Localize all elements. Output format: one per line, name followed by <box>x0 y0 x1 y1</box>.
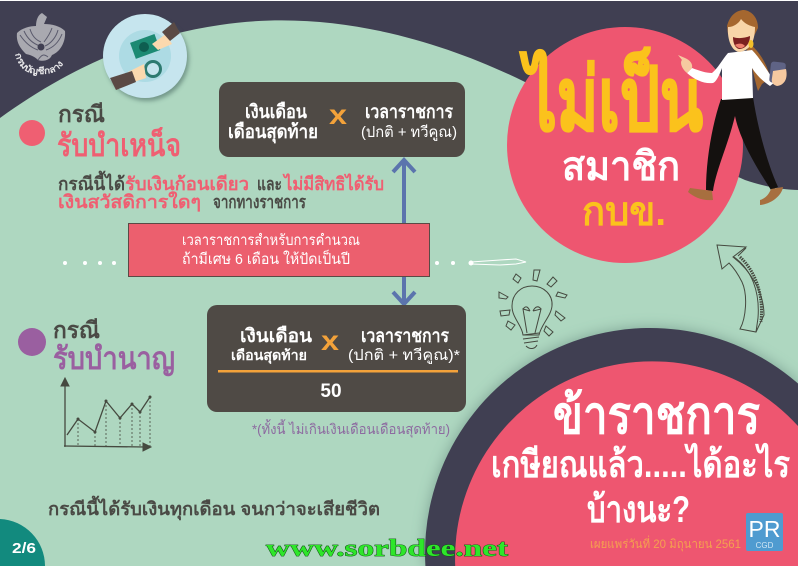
dotted divider with pen <box>63 259 526 266</box>
text block: pension description <box>58 170 384 212</box>
page number tab <box>0 519 45 566</box>
label: service time: เวลาราชการ <box>361 326 450 347</box>
note box: rounding rule: เวลาราชการสำหรับการคำนวณ <box>182 232 360 249</box>
phone <box>769 61 786 84</box>
icon: curved hand-drawn arrow <box>717 245 764 332</box>
right margin strip <box>798 0 800 566</box>
note box: rounding rule <box>128 224 430 276</box>
trousers <box>706 97 778 191</box>
section: annuity heading <box>18 317 175 377</box>
formula box: lump-sum: เดือนสุดท้าย <box>228 121 318 144</box>
shirt <box>687 50 775 100</box>
label: salary: เงินเดือน <box>240 325 312 347</box>
text block: pension description: ไม่มีสิทธิได้รับ <box>282 173 384 194</box>
bullet: pink <box>19 120 45 146</box>
page number tab: 2/6 <box>12 540 36 557</box>
text block: pension description: กรณีนี้ได้ <box>58 170 125 194</box>
title: ไม่เป็น: ไม่เป็น <box>519 46 703 149</box>
footnote: *(ทั้งนี้ ไม่เกินเงินเดือนเดือนสุดท้าย) <box>252 419 450 438</box>
heading: รับบำเหน็จ: รับบำเหน็จ <box>57 126 181 163</box>
text block: pension description: เงินสวัสดิการใดๆ <box>58 191 201 212</box>
badge: PR CGD: PR <box>749 516 780 542</box>
text block: pension description: รับเงินก้อนเดียว <box>125 174 249 194</box>
denominator: 50 <box>320 381 342 402</box>
multiply sign: x <box>321 325 339 356</box>
heading: กรณี: กรณี <box>58 101 105 127</box>
formula box: lump-sum: (ปกติ + ทวีคูณ) <box>361 124 457 141</box>
arrow: up and down connector <box>393 160 415 304</box>
label: service time: เวลาราชการ <box>365 102 454 123</box>
line chart icon <box>61 378 152 451</box>
label: salary: เงินเดือน <box>245 101 307 123</box>
publication date: เผยแพร่วันที่ 20 มิถุนายน 2561 <box>590 535 741 552</box>
fraction line <box>218 370 458 372</box>
section: pension heading <box>19 101 181 163</box>
formula box: monthly pension: (ปกติ + ทวีคูณ)* <box>348 347 460 364</box>
panel: pink bottom circle <box>455 361 798 566</box>
bullet: purple <box>18 328 46 356</box>
formula box: monthly pension: เดือนสุดท้าย <box>231 347 307 364</box>
icon: light bulb <box>499 270 567 349</box>
hand holding phone <box>772 69 787 86</box>
text block: pension description: จากทางราชการ <box>213 192 306 212</box>
hand pointing <box>678 55 692 73</box>
icon: government emblem <box>15 13 66 76</box>
shoes <box>688 188 713 200</box>
title: สมาชิก: สมาชิก <box>562 145 680 189</box>
title: กบข.: กบข. <box>582 190 666 234</box>
multiply sign: x <box>329 99 347 130</box>
text block: pension description: และ <box>257 174 282 194</box>
illustration: woman with phone <box>678 10 787 205</box>
head <box>727 10 758 40</box>
heading: รับบำนาญ: รับบำนาญ <box>53 341 175 377</box>
panel: dark bottom arc <box>425 328 798 566</box>
formula box: lump-sum <box>219 82 465 157</box>
badge: PR CGD <box>746 513 783 551</box>
headline: ข้าราชการ: ข้าราชการ <box>553 387 760 445</box>
watermark: www.sorbdee.net <box>266 536 508 562</box>
icon: hands exchanging money <box>103 14 189 101</box>
formula box: monthly pension <box>207 305 466 412</box>
panel: dark circle shadow <box>425 328 798 566</box>
heading: กรณี: กรณี <box>53 317 100 343</box>
emblem caption: กรมบัญชีกลาง <box>15 53 63 76</box>
panel: pink title circle <box>507 27 743 263</box>
headline: บ้างนะ: บ้างนะ? <box>587 489 690 530</box>
note box: rounding rule: ถ้ามีเศษ 6 เดือน ให้ปัดเป็นปี <box>182 249 350 268</box>
ponytail <box>746 44 770 91</box>
badge: PR CGD: CGD <box>756 541 774 550</box>
text block: annuity description: กรณีนี้ได้รับเงินทุกเดือน จนกว่าจะเสียชีวิต <box>48 495 380 521</box>
